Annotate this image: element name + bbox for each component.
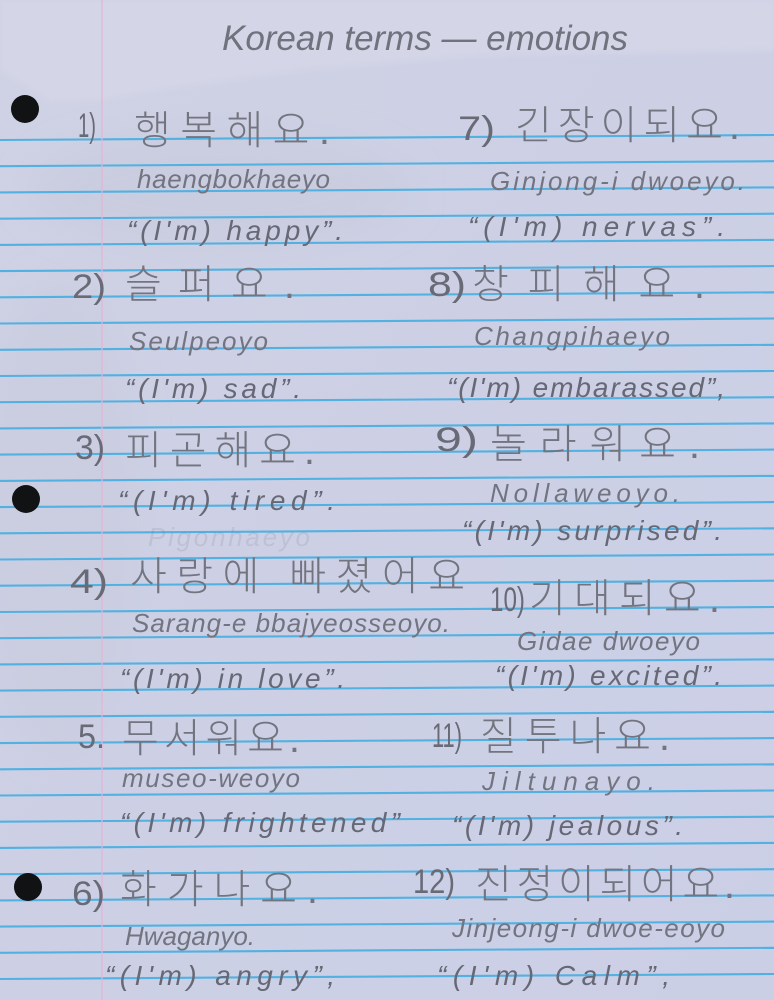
Korean term: 질투나요. bbox=[480, 715, 670, 759]
number: 3) bbox=[75, 429, 105, 467]
term 12: calm bbox=[413, 863, 735, 991]
Korean term: 슬퍼요. bbox=[125, 263, 295, 307]
romanization: Gidae dwoeyo bbox=[517, 626, 700, 656]
punched hole: middle bbox=[12, 485, 40, 513]
number: 6) bbox=[72, 875, 105, 913]
punched hole: top bbox=[11, 95, 39, 123]
number: 11) bbox=[432, 717, 462, 755]
number: 9) bbox=[435, 421, 478, 459]
translation: “(I'm) frightened” bbox=[120, 807, 402, 838]
translation: “(I'm) embarassed”, bbox=[447, 372, 725, 403]
Korean term: 행복해요. bbox=[134, 109, 330, 153]
translation: “(I'm) sad”. bbox=[125, 373, 301, 404]
Korean term: 기대되요. bbox=[529, 577, 720, 621]
romanization: Sarang-e bbajyeosseoyo. bbox=[132, 608, 450, 638]
term 4: in love bbox=[70, 555, 465, 694]
number: 7) bbox=[458, 110, 495, 148]
term 1: happy bbox=[78, 107, 343, 246]
romanization: Nollaweoyo. bbox=[490, 478, 680, 508]
romanization: Ginjong-i dwoeyo. bbox=[490, 166, 745, 196]
Korean term: 놀라워요. bbox=[490, 423, 700, 467]
number: 10) bbox=[490, 581, 525, 619]
term 8: embarrassed bbox=[428, 263, 725, 403]
number: 8) bbox=[428, 266, 466, 304]
term 3: tired bbox=[75, 429, 335, 552]
punched hole: bottom bbox=[14, 873, 42, 901]
term 5: frightened bbox=[78, 717, 402, 838]
translation: “(I'm) surprised”. bbox=[462, 515, 722, 546]
romanization: haengbokhaeyo bbox=[137, 164, 330, 194]
Korean term: 진정이되어요. bbox=[475, 863, 735, 907]
Korean term: 창피해요. bbox=[472, 263, 705, 307]
faint erased romanization: Pigonhaeyo bbox=[148, 522, 310, 552]
Korean term: 화가나요. bbox=[120, 868, 318, 912]
number: 2) bbox=[72, 268, 106, 306]
translation: “(I'm) Calm”, bbox=[437, 960, 670, 991]
romanization: Jiltunayo. bbox=[481, 766, 655, 796]
term 10: excited bbox=[490, 577, 722, 691]
Korean term: 피곤해요. bbox=[125, 429, 315, 473]
title: Korean terms — emotions bbox=[222, 19, 628, 58]
romanization: Changpihaeyo bbox=[474, 321, 670, 351]
term 2: sad bbox=[72, 263, 301, 404]
number: 12) bbox=[413, 863, 455, 901]
translation: “(I'm) tired”. bbox=[118, 485, 335, 516]
romanization: museo-weoyo bbox=[122, 763, 300, 793]
romanization: Seulpeoyo bbox=[129, 326, 268, 356]
translation: “(I'm) happy”. bbox=[127, 215, 343, 246]
number: 5. bbox=[78, 718, 105, 756]
term 11: jealous bbox=[432, 715, 683, 841]
translation: “(I'm) excited”. bbox=[495, 660, 722, 691]
number: 4) bbox=[70, 563, 108, 601]
number: 1) bbox=[78, 107, 96, 145]
Korean term: 사랑에 빠졌어요 bbox=[130, 555, 465, 599]
translation: “(I'm) nervas”. bbox=[468, 211, 725, 242]
term 7: nervous bbox=[458, 104, 745, 242]
Korean term: 긴장이되요. bbox=[515, 104, 740, 148]
romanization: Jinjeong-i dwoe-eoyo bbox=[451, 913, 725, 943]
romanization: Hwaganyo. bbox=[125, 921, 255, 951]
translation: “(I'm) angry”, bbox=[105, 960, 335, 991]
term 9: surprised bbox=[435, 421, 722, 546]
term 6: angry bbox=[72, 868, 335, 991]
translation: “(I'm) jealous”. bbox=[452, 810, 683, 841]
translation: “(I'm) in love”. bbox=[120, 663, 345, 694]
Korean term: 무서워요. bbox=[122, 717, 300, 761]
